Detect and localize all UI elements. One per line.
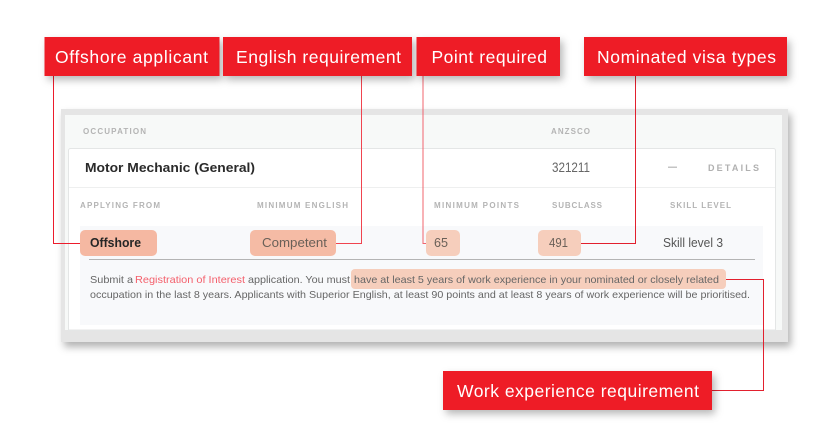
heading: skill level: SKILL LEVEL [670, 201, 731, 210]
label: work experience requirement [443, 371, 712, 410]
label: point required: Point required [432, 47, 547, 67]
heading: minimum points: MINIMUM POINTS [434, 201, 520, 210]
label: point required [416, 37, 560, 76]
description text: Submit a [90, 274, 133, 286]
description text: Registration of Interest [135, 274, 245, 286]
panel: occupation card [68, 148, 776, 330]
pill: competent [250, 230, 336, 256]
label: english requirement [223, 37, 412, 76]
label: english requirement: English requirement [236, 47, 401, 67]
connector: offshore applicant [54, 76, 80, 244]
pill: 65 points: 65 [434, 235, 448, 250]
pill: offshore: Offshore [90, 236, 141, 250]
connector: english requirement [336, 76, 362, 244]
heading: anzsco column: ANZSCO [551, 127, 590, 136]
label: nominated visa types: Nominated visa types [597, 47, 776, 67]
icon: collapse dash [668, 166, 677, 168]
skill level value: Skill level 3 [663, 235, 723, 250]
pill: subclass 491 [538, 230, 581, 256]
description text: occupation in the last 8 years. Applicants with Superior English, at least 90 points and at least 8 years of work experience will be prioritised. [90, 289, 750, 301]
description text: have at least 5 years of work experience in your nominated or closely related [354, 274, 719, 286]
pill: subclass 491: 491 [549, 235, 568, 250]
pill: 65 points [426, 230, 460, 256]
pill: competent: Competent [262, 235, 327, 250]
connector: work experience [712, 280, 764, 390]
heading: subclass: SUBCLASS [552, 201, 603, 210]
label: offshore applicant: Offshore applicant [55, 47, 208, 67]
panel: occupation table screenshot [61, 109, 788, 342]
highlight: work experience text [351, 269, 726, 289]
label: work experience requirement: Work experience requirement [457, 381, 699, 401]
heading: occupation column: OCCUPATION [83, 127, 146, 136]
connector: nominated visa types [581, 76, 636, 244]
panel: visa details row [80, 226, 763, 325]
label: offshore applicant [44, 37, 220, 76]
description text: application. You must [248, 274, 350, 286]
connector: point required [423, 76, 426, 244]
occupation name: Motor Mechanic (General) [85, 160, 255, 175]
anzsco code: 321211 [552, 160, 590, 175]
pill: offshore [80, 230, 157, 256]
label: nominated visa types [584, 37, 787, 76]
heading: minimum english: MINIMUM ENGLISH [257, 201, 348, 210]
description text [90, 274, 750, 301]
details link: DETAILS [708, 163, 759, 173]
heading: applying from: APPLYING FROM [80, 201, 160, 210]
